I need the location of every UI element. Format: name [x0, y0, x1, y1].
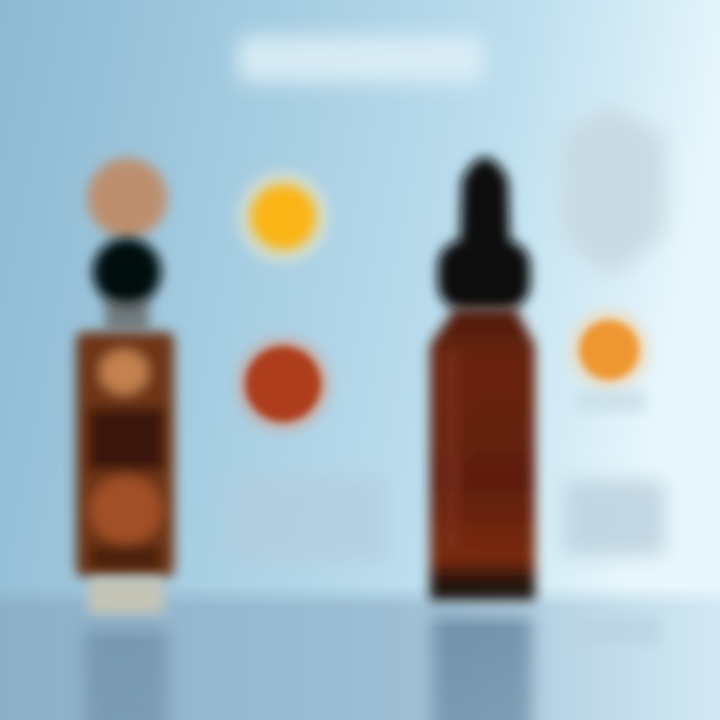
shield icon	[562, 105, 665, 275]
circle icon: orange	[569, 310, 649, 390]
circle icon: yellow	[237, 171, 329, 263]
bottle reflection left	[84, 615, 168, 720]
left product: stacked bottle	[76, 158, 174, 614]
text block: left panel	[232, 476, 387, 561]
bottle body	[76, 332, 174, 577]
title	[238, 36, 483, 82]
bottle neck shadow	[105, 300, 149, 330]
caption: lower right	[575, 618, 660, 644]
text block: right panel	[563, 480, 665, 556]
dropper bulb	[438, 158, 530, 310]
bottle reflection right	[432, 605, 532, 720]
circle icon: rust	[236, 337, 330, 431]
caption: orange	[575, 390, 645, 412]
bottle black cap	[93, 238, 161, 306]
bottle cork top	[87, 158, 167, 238]
bottle neck and body	[430, 308, 535, 600]
right product: dropper bottle	[430, 158, 535, 600]
bottle base	[88, 578, 164, 614]
